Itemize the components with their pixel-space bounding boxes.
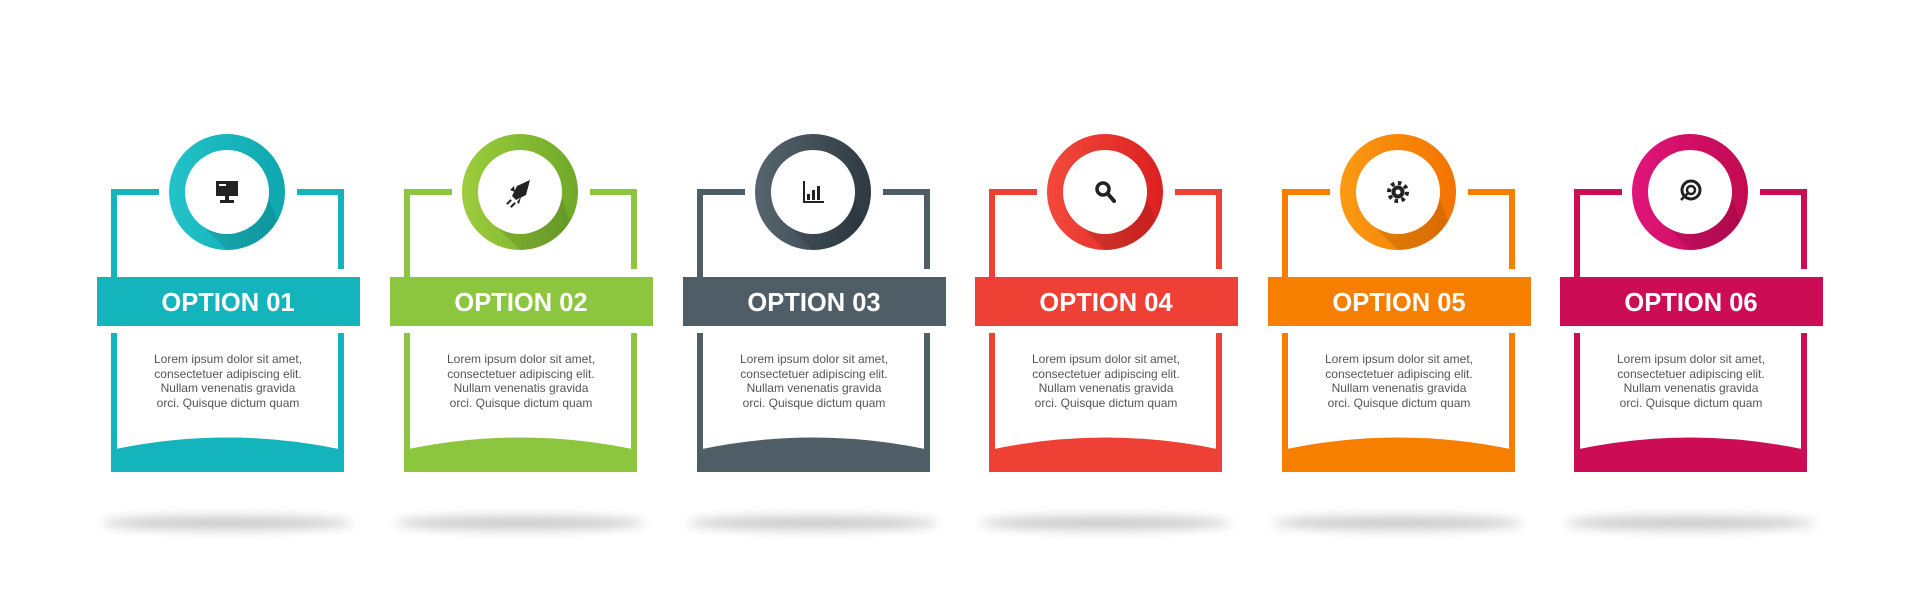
banner [975,277,1238,326]
icon: bar chart [803,181,824,203]
icon: target [1681,181,1700,200]
body text [154,352,302,410]
frame [697,189,930,472]
body text [1032,352,1180,410]
body text: Nullam venenatis gravida [1039,381,1174,395]
icon: gear [1389,183,1407,201]
frame [111,189,344,472]
card: option 01 [97,134,360,530]
banner: OPTION 01 [161,289,295,317]
banner: OPTION 05 [1332,289,1466,317]
circle [755,134,871,250]
circle [1340,134,1456,250]
body text: orci. Quisque dictum quam [1328,396,1470,410]
body text: Nullam venenatis gravida [1624,381,1759,395]
shadow [980,516,1230,530]
card: option 06 [1560,134,1823,530]
shadow [688,516,938,530]
circle [169,134,285,250]
body text [1617,352,1765,410]
body text: orci. Quisque dictum quam [450,396,592,410]
card: option 03 [683,134,946,530]
body text: consectetuer adipiscing elit. [1032,367,1180,381]
body text: Lorem ipsum dolor sit amet, [1325,352,1473,366]
frame [989,189,1222,472]
body text: Nullam venenatis gravida [161,381,296,395]
banner [390,277,653,326]
body text: Nullam venenatis gravida [747,381,882,395]
banner: OPTION 03 [747,289,881,317]
icon: rocket [506,180,530,208]
shadow [395,516,645,530]
icon: magnifier [1097,183,1114,201]
circle [1632,134,1748,250]
body text: consectetuer adipiscing elit. [1325,367,1473,381]
body text: Nullam venenatis gravida [454,381,589,395]
shadow [1273,516,1523,530]
frame [1574,189,1807,472]
shadow [1565,516,1815,530]
banner: OPTION 06 [1624,289,1758,317]
body text [1325,352,1473,410]
body text: consectetuer adipiscing elit. [740,367,888,381]
body text: Lorem ipsum dolor sit amet, [1617,352,1765,366]
card: option 04 [975,134,1238,530]
frame [1282,189,1515,472]
body text: Lorem ipsum dolor sit amet, [1032,352,1180,366]
body text: orci. Quisque dictum quam [1620,396,1762,410]
card: option 02 [390,134,653,530]
body text: orci. Quisque dictum quam [743,396,885,410]
shadow [102,516,352,530]
banner [1268,277,1531,326]
body text [740,352,888,410]
body text: Lorem ipsum dolor sit amet, [447,352,595,366]
body text: Lorem ipsum dolor sit amet, [154,352,302,366]
banner [1560,277,1823,326]
body text: consectetuer adipiscing elit. [447,367,595,381]
body text: consectetuer adipiscing elit. [154,367,302,381]
banner: OPTION 02 [454,289,588,317]
circle [462,134,578,250]
body text: orci. Quisque dictum quam [1035,396,1177,410]
body text [447,352,595,410]
banner [683,277,946,326]
frame [404,189,637,472]
body text: orci. Quisque dictum quam [157,396,299,410]
body text: Nullam venenatis gravida [1332,381,1467,395]
banner [97,277,360,326]
icon: monitor [216,181,238,203]
body text: consectetuer adipiscing elit. [1617,367,1765,381]
circle [1047,134,1163,250]
body text: Lorem ipsum dolor sit amet, [740,352,888,366]
card: option 05 [1268,134,1531,530]
banner: OPTION 04 [1039,289,1173,317]
